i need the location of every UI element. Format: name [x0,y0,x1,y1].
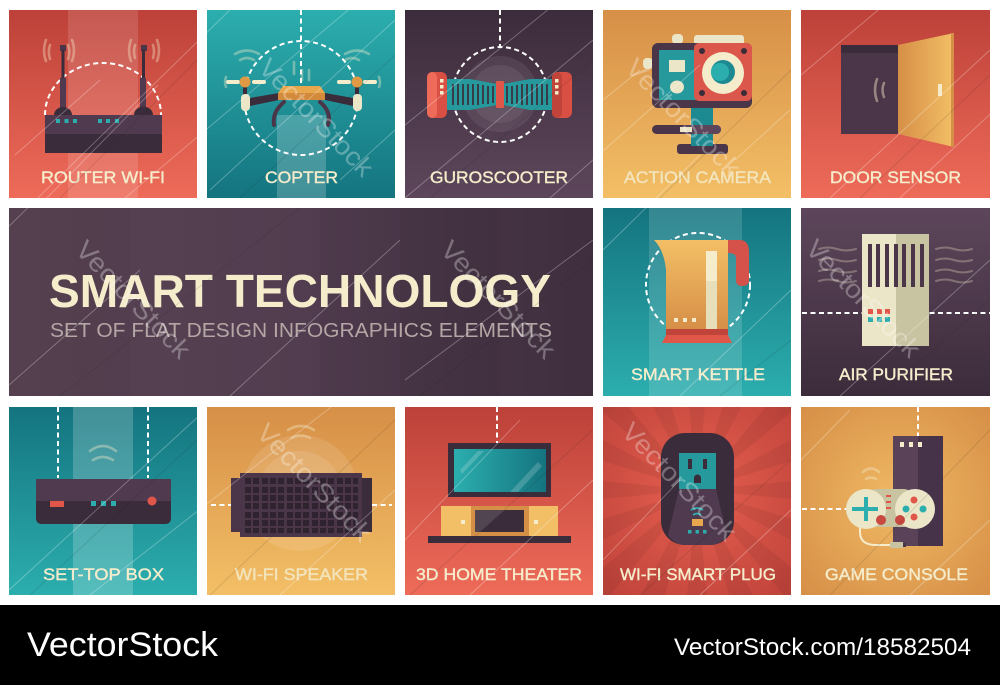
label: wi-fi speaker: WI-FI SPEAKER [235,565,368,584]
icon: door with sensor [841,33,954,147]
footer: image id: VectorStock.com/18582504 [674,634,971,661]
label: door sensor: DOOR SENSOR [830,168,961,187]
panel: guroscooter [405,10,593,198]
label: set-top box: SET-TOP BOX [43,565,164,584]
icon: copter drone [225,10,380,155]
panel: air purifier [801,208,990,396]
label: router wi-fi: ROUTER WI-FI [41,168,165,187]
footer bar [0,605,1000,685]
icon: gyroscooter [427,10,572,142]
icon: speaker [231,426,372,537]
icon: game console [846,436,943,548]
panel: smart kettle [603,208,791,396]
panel: wi-fi smart plug [603,407,791,595]
icon: home theater [428,443,571,543]
panel: title banner [9,208,593,396]
panel: door sensor [801,10,990,198]
watermark: vectorstock stamps: VectorStock [435,234,563,365]
icon: air purifier [819,234,972,346]
watermark: vectorstock stamps: VectorStock [620,52,748,183]
watermark: vectorstock stamps: VectorStock [251,417,379,548]
label: smart kettle: SMART KETTLE [631,365,765,384]
heading: smart technology: SMART TECHNOLOGY [49,265,551,317]
watermark: vectorstock stamps: VectorStock [253,52,381,183]
footer: brand: VectorStock [27,626,219,664]
panel: wi-fi speaker [207,407,395,595]
panel: 3d home theater [405,407,593,595]
icon: set-top box [36,446,171,524]
icon: router [44,40,162,153]
watermark: vectorstock stamps: VectorStock [800,233,928,364]
label: 3d home theater: 3D HOME THEATER [416,565,582,584]
watermark: vectorstock stamps: VectorStock [616,416,744,547]
watermark: vectorstock stamps: VectorStock [70,234,198,365]
panel: game console [801,407,990,595]
subheading: SET OF FLAT DESIGN INFOGRAPHICS ELEMENTS [50,320,552,342]
icon: kettle [646,233,750,343]
icon: smart plug [661,433,734,545]
label: copter: COPTER [265,168,338,187]
label: guroscooter: GUROSCOOTER [430,168,568,187]
label: wi-fi smart plug: WI-FI SMART PLUG [620,565,776,584]
label: action camera: ACTION CAMERA [624,168,772,187]
label: air purifier: AIR PURIFIER [839,365,953,384]
icon: action camera [643,34,752,154]
label: game console: GAME CONSOLE [825,565,968,584]
panel: router wi-fi [9,10,197,198]
panel: copter [207,10,395,198]
panel: set-top box [9,407,197,595]
watermark: vectorstock stamps [70,52,928,548]
panel: action camera [603,10,791,198]
